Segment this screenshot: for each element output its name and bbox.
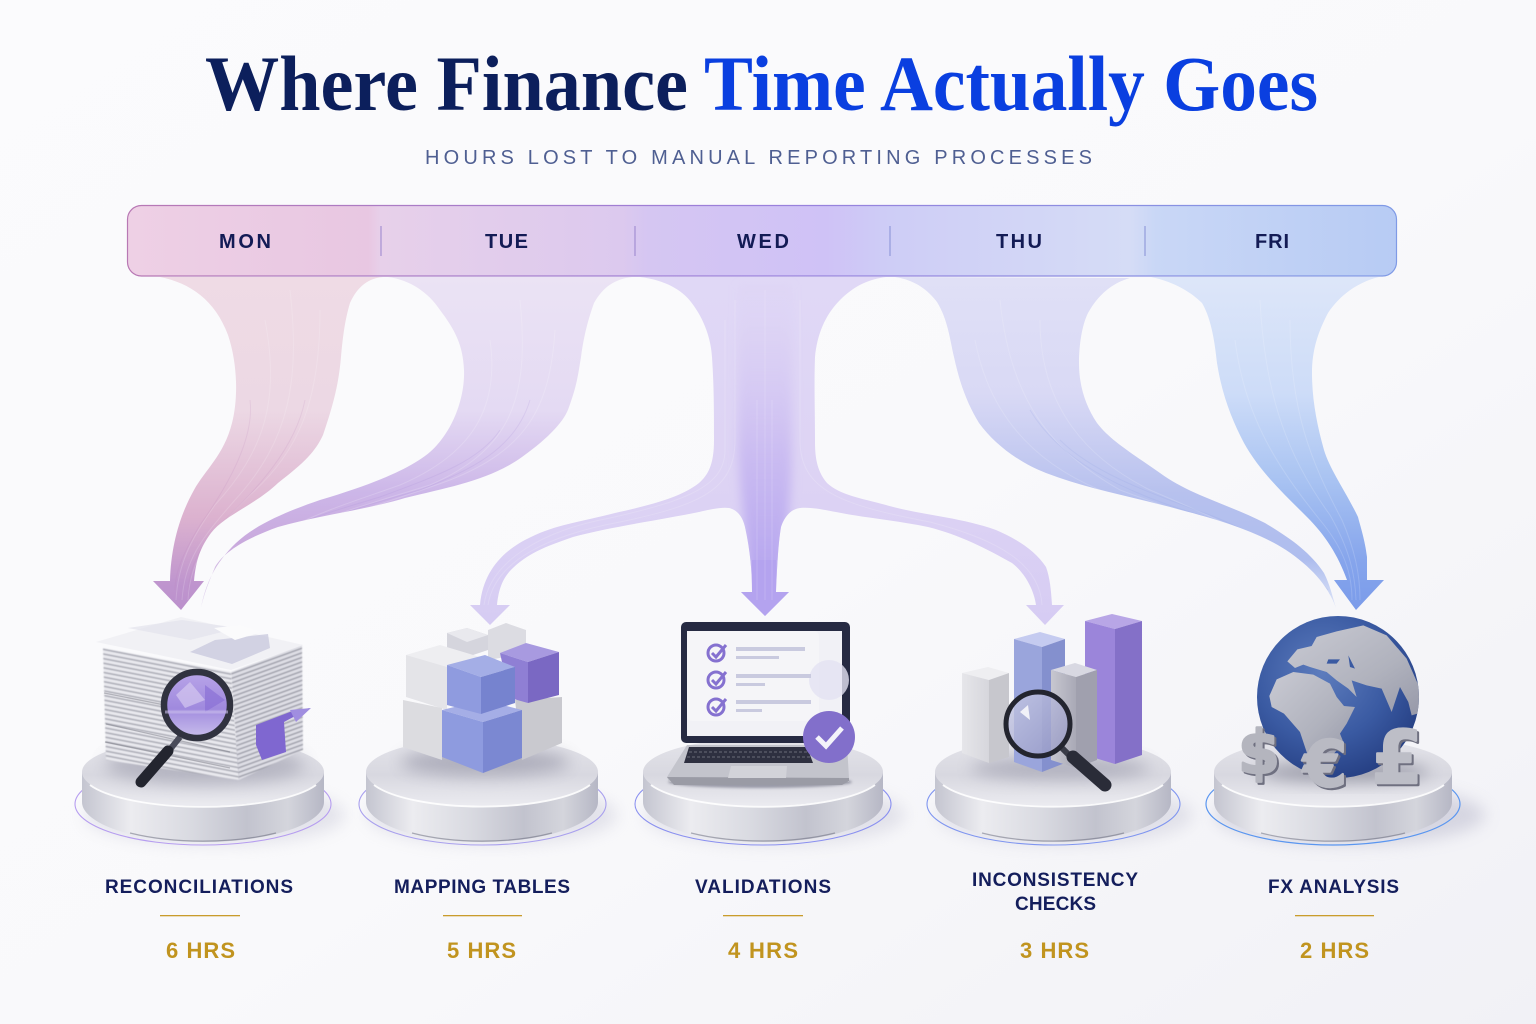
- icon: cube cluster: [400, 623, 570, 776]
- flow: Friday to FX: [1152, 277, 1384, 610]
- euro sign: €: [1303, 730, 1349, 803]
- dollar sign: $: [1238, 718, 1280, 788]
- dollar sign: $: [1240, 720, 1282, 790]
- verified badge: [803, 711, 855, 763]
- label: fx analysis: FX ANALYSIS: [1268, 877, 1399, 898]
- magnifier: [1006, 692, 1105, 785]
- icon: paper stack with magnifier: [96, 617, 311, 785]
- subtitle: HOURS LOST TO MANUAL REPORTING PROCESSES: [425, 147, 1092, 169]
- label: inconsistency checks: INCONSISTENCY: [972, 870, 1138, 891]
- flow: Tuesday to reconciliations: [202, 277, 631, 604]
- checklist rows: [708, 645, 811, 715]
- pound sign: £: [1372, 716, 1422, 801]
- euro sign: €: [1301, 728, 1347, 801]
- day: Friday: FRI: [1255, 231, 1289, 253]
- label: validations: VALIDATIONS: [695, 877, 831, 898]
- label: mapping tables: MAPPING TABLES: [394, 877, 570, 898]
- africa: [1269, 672, 1355, 759]
- pound sign: £: [1374, 718, 1424, 803]
- inland seas: [1327, 655, 1355, 669]
- icon: laptop with checklist: [667, 622, 855, 788]
- day: Tuesday: TUE: [485, 231, 528, 253]
- label: reconciliations: 6 HRS: [166, 938, 235, 963]
- title: Time Actually Goes: [704, 40, 1318, 127]
- day: Wednesday: WED: [737, 231, 789, 253]
- flow: Wednesday to three tasks: [460, 270, 1070, 630]
- pedestal 2: [359, 738, 617, 845]
- pedestal 1: [75, 738, 345, 845]
- label: reconciliations: [105, 877, 293, 963]
- icon: globe with currency symbols: [1238, 616, 1430, 803]
- title: Where Finance: [205, 40, 688, 127]
- label: validations: [695, 877, 831, 963]
- pedestal 5: [1206, 738, 1485, 845]
- label: mapping tables: [394, 877, 570, 963]
- label: fx analysis: 2 HRS: [1300, 938, 1369, 963]
- label: inconsistency checks: CHECKS: [1015, 894, 1096, 915]
- day: Monday: MON: [219, 231, 271, 253]
- icon: bar chart with magnifier: [962, 614, 1150, 785]
- eurasia: [1287, 625, 1423, 715]
- title: [205, 40, 1318, 127]
- flow: Thursday to FX: [896, 277, 1336, 606]
- day: Thursday: THU: [996, 231, 1042, 253]
- flow: Monday to reconciliations: [153, 277, 382, 610]
- label: fx analysis: [1268, 877, 1399, 963]
- pedestal 4: [927, 738, 1193, 845]
- label: reconciliations: RECONCILIATIONS: [105, 877, 293, 898]
- day banner: [128, 206, 1396, 276]
- label: inconsistency checks: 3 HRS: [1020, 938, 1089, 963]
- pedestal 3: [635, 738, 905, 845]
- label: validations: 4 HRS: [728, 938, 798, 963]
- label: mapping tables: 5 HRS: [447, 938, 516, 963]
- magnifier: [141, 672, 230, 782]
- label: inconsistency checks: [972, 870, 1138, 963]
